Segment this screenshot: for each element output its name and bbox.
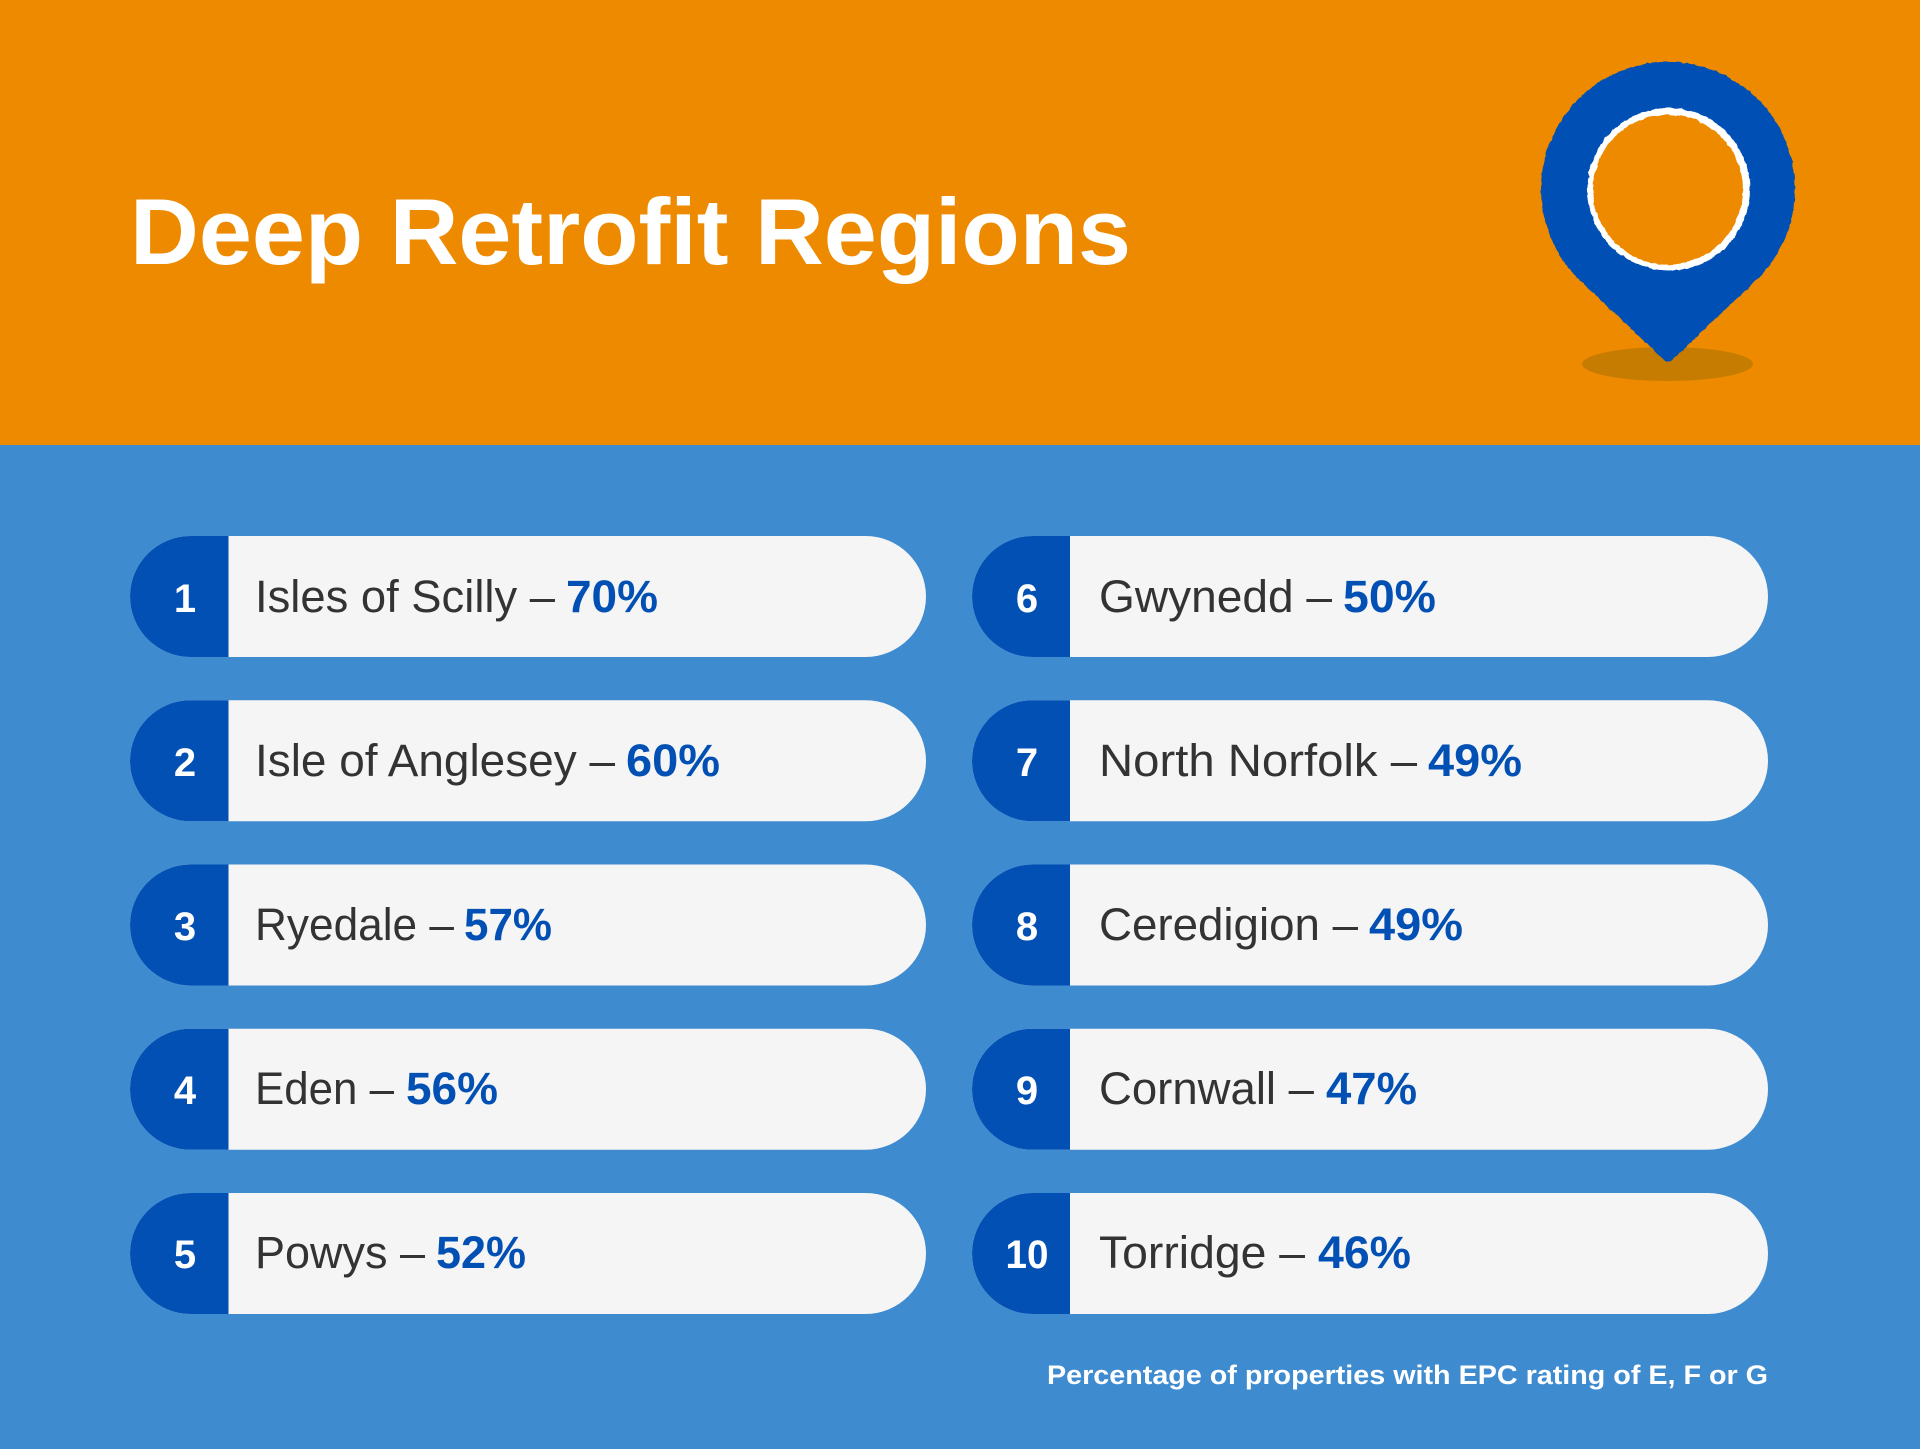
row 9: Cornwall: 47% — [1326, 1063, 1417, 1114]
row 10: Torridge: Torridge – — [1099, 1227, 1305, 1278]
row 3: Ryedale: 3 — [174, 905, 196, 949]
row 4: Eden: 4 — [174, 1069, 197, 1113]
row 10: Torridge: 46% — [1318, 1227, 1411, 1278]
icon: map pin with shadow — [1541, 62, 1795, 381]
row 2: Isle of Anglesey: 2 — [174, 741, 196, 785]
row 6: Gwynedd: 6 — [1016, 577, 1038, 621]
row 9: Cornwall: Cornwall – — [1099, 1063, 1314, 1114]
footnote: Percentage of properties with EPC rating of E, F or G — [1047, 1360, 1768, 1390]
row 7: North Norfolk: 7 — [1016, 741, 1038, 785]
row 6: Gwynedd — [972, 536, 1768, 657]
row 3: Ryedale — [130, 864, 926, 986]
row 8: Ceredigion — [972, 864, 1768, 986]
row 1: Isles of Scilly — [130, 536, 926, 657]
row 6: Gwynedd: 50% — [1343, 571, 1436, 622]
row 2: Isle of Anglesey: 60% — [626, 735, 720, 786]
row 9: Cornwall — [972, 1029, 1768, 1150]
row 8: Ceredigion: 8 — [1016, 905, 1038, 949]
row 2: Isle of Anglesey: Isle of Anglesey – — [255, 735, 615, 786]
row 9: Cornwall: 9 — [1016, 1069, 1038, 1113]
row 3: Ryedale: Ryedale – — [255, 899, 454, 950]
header: orange band — [0, 0, 1920, 445]
row 8: Ceredigion: 49% — [1369, 899, 1463, 950]
row 1: Isles of Scilly: Isles of Scilly – — [255, 571, 555, 622]
row 5: Powys: 52% — [436, 1227, 526, 1278]
row 1: Isles of Scilly: 1 — [174, 577, 196, 621]
row 6: Gwynedd: Gwynedd – — [1099, 571, 1332, 622]
row 4: Eden — [130, 1029, 926, 1150]
row 1: Isles of Scilly: 70% — [566, 571, 658, 622]
row 5: Powys — [130, 1193, 926, 1314]
title: Deep Retrofit Regions — [130, 179, 1131, 284]
row 7: North Norfolk: North Norfolk – — [1099, 735, 1417, 786]
row 3: Ryedale: 57% — [464, 899, 552, 950]
row 8: Ceredigion: Ceredigion – — [1099, 899, 1358, 950]
row 10: Torridge: 10 — [1006, 1233, 1048, 1277]
row 2: Isle of Anglesey — [130, 700, 926, 821]
row 4: Eden: Eden – — [255, 1063, 394, 1114]
row 4: Eden: 56% — [406, 1063, 498, 1114]
row 5: Powys: 5 — [174, 1233, 196, 1277]
row 5: Powys: Powys – — [255, 1227, 425, 1278]
row 7: North Norfolk: 49% — [1428, 735, 1522, 786]
row 7: North Norfolk — [972, 700, 1768, 821]
row 10: Torridge — [972, 1193, 1768, 1314]
